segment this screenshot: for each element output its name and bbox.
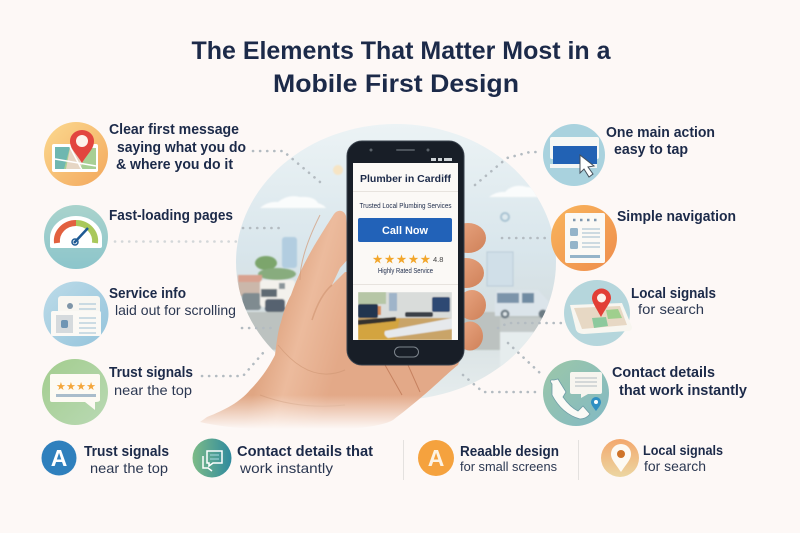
- text: bottom contact details: [237, 444, 373, 476]
- text: service info: laid out for scrolling: [115, 302, 236, 318]
- title: [192, 37, 612, 98]
- text: bottom local signals: [643, 442, 723, 474]
- text: one main action: easy to tap: [614, 142, 688, 158]
- text: bottom contact details: Contact details that: [237, 444, 373, 460]
- item: one main action: [543, 124, 715, 186]
- item: service info: [44, 282, 236, 346]
- screen subheading: Trusted Local Plumbing Services: [360, 203, 452, 210]
- illustration: town scene circle behind phone: [230, 124, 560, 402]
- text: contact details: [612, 365, 747, 399]
- text: local signals: [631, 286, 716, 317]
- bottom item: readable design: [418, 440, 559, 476]
- icon: map pin on map: [44, 122, 108, 186]
- phone body: [347, 141, 464, 365]
- text: clear first message: & where you do it: [116, 157, 233, 173]
- text: fast-loading pages: Fast-loading pages: [109, 208, 233, 224]
- icon: chat bubbles: [192, 438, 232, 478]
- text: bottom local signals: for search: [644, 458, 706, 474]
- icon: local map pin: [564, 280, 632, 346]
- star rating: [372, 252, 443, 275]
- text: service info: [109, 286, 236, 318]
- call now button: [358, 218, 452, 242]
- item: simple navigation: [551, 205, 736, 271]
- text: clear first message: Clear first message: [109, 122, 239, 138]
- connector dots: left side: [115, 151, 320, 376]
- text: service info: Service info: [109, 286, 186, 302]
- star rating: ★★★★★: [372, 252, 431, 266]
- icon: navigation page: [551, 205, 617, 271]
- text: trust signals: near the top: [114, 382, 192, 398]
- text: local signals: for search: [638, 301, 704, 317]
- icon: orange letter A: [418, 440, 454, 476]
- bottom item: contact details: [192, 438, 373, 478]
- icon: phone and message: [543, 360, 609, 426]
- connector dots: right side: [463, 152, 563, 392]
- text: clear first message: saying what you do: [117, 140, 246, 156]
- icon: speed gauge: [44, 205, 108, 269]
- icon: orange letter A: A: [428, 445, 444, 471]
- text: bottom readable design: [460, 444, 559, 474]
- hand holding phone: [190, 211, 486, 435]
- text: one main action: One main action: [606, 125, 715, 141]
- item: contact details: [543, 360, 747, 426]
- phone status bar: [370, 148, 452, 161]
- screen heading: Plumber in Cardiff: [360, 173, 451, 185]
- text: bottom trust signals: near the top: [90, 460, 168, 476]
- text: bottom local signals: Local signals: [643, 442, 723, 458]
- icon: review speech bubble: [42, 359, 108, 425]
- title: Mobile First Design: [273, 70, 519, 98]
- screen photo: [358, 292, 452, 340]
- text: simple navigation: Simple navigation: [617, 209, 736, 225]
- phone screen: [353, 163, 458, 340]
- text: bottom readable design: for small screens: [460, 459, 557, 474]
- icon: service info cards: [44, 282, 108, 346]
- text: contact details: that work instantly: [619, 383, 747, 399]
- text: bottom contact details: work instantly: [239, 460, 333, 476]
- title: The Elements That Matter Most in a: [192, 37, 612, 65]
- phone: [347, 141, 464, 365]
- bottom item: trust signals: [42, 440, 169, 476]
- text: bottom readable design: Reaable design: [460, 444, 559, 460]
- text: bottom trust signals: [84, 444, 169, 476]
- text: bottom trust signals: Trust signals: [84, 444, 169, 460]
- text: one main action: [606, 125, 715, 158]
- text: local signals: Local signals: [631, 286, 716, 302]
- icon: tap button with cursor: [543, 124, 605, 186]
- item: clear first message: [44, 122, 246, 186]
- text: trust signals: [109, 365, 193, 398]
- item: fast-loading pages: [44, 205, 233, 269]
- icon: review speech bubble: ★★★★: [56, 380, 96, 393]
- call now button: Call Now: [382, 225, 428, 237]
- bottom item: local signals: [601, 439, 723, 477]
- text: contact details: Contact details: [612, 365, 715, 381]
- text: trust signals: Trust signals: [109, 365, 193, 381]
- icon: location pin: [601, 439, 639, 477]
- home button: [394, 347, 418, 357]
- text: clear first message: [109, 122, 246, 173]
- item: local signals: [564, 280, 716, 346]
- star rating: Highly Rated Service: [378, 268, 433, 275]
- star rating: 4.8: [433, 255, 443, 264]
- item: trust signals: [42, 359, 193, 425]
- icon: blue letter A: A: [51, 445, 67, 471]
